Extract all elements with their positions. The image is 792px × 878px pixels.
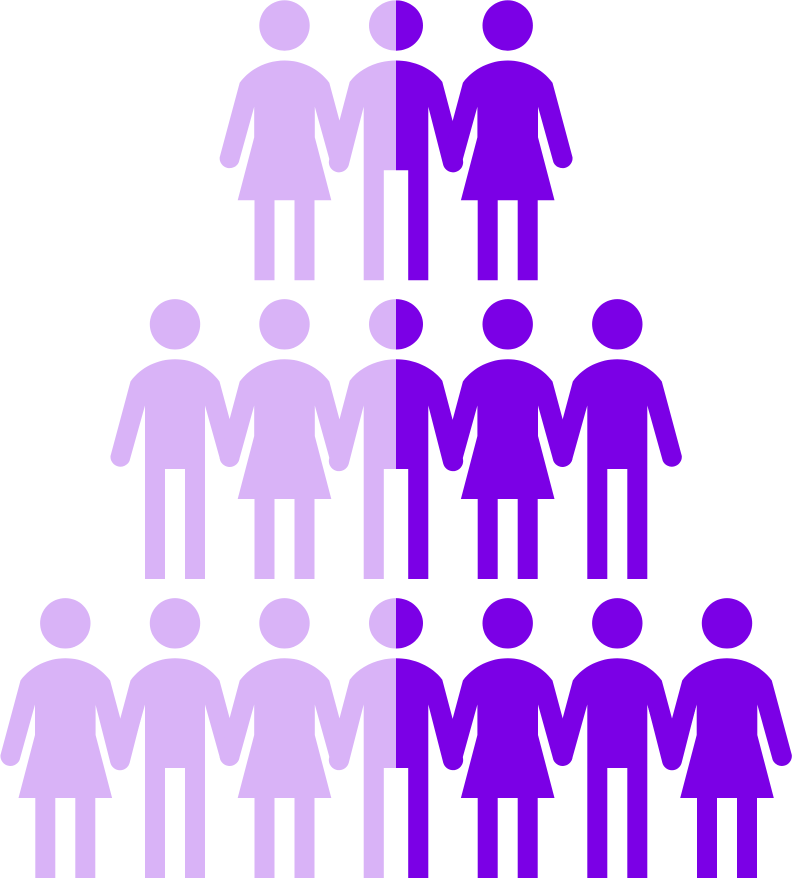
figure: light man xyxy=(110,598,240,878)
figure: dark man xyxy=(553,598,682,878)
figure: light woman xyxy=(220,0,349,280)
figure: dark woman xyxy=(443,598,573,878)
figure: light man xyxy=(110,299,240,579)
figure: light woman xyxy=(220,299,349,579)
figure: half light half dark man xyxy=(329,598,463,878)
joined hands: light woman and light man xyxy=(96,704,144,770)
figure: dark man xyxy=(553,299,682,579)
figure: light woman xyxy=(220,598,349,878)
figure: half light half dark man xyxy=(329,0,463,280)
pyramid row 3: seven figures xyxy=(0,598,792,878)
figure: dark woman xyxy=(662,598,792,878)
joined hands: dark man and dark woman xyxy=(648,704,696,770)
figure: dark woman xyxy=(443,0,573,280)
figure: light woman xyxy=(0,598,130,878)
pyramid row 2: five figures xyxy=(110,299,682,579)
figure: half light half dark man xyxy=(329,299,463,579)
figure: dark woman xyxy=(443,299,573,579)
pyramid row 1: three figures xyxy=(220,0,573,280)
